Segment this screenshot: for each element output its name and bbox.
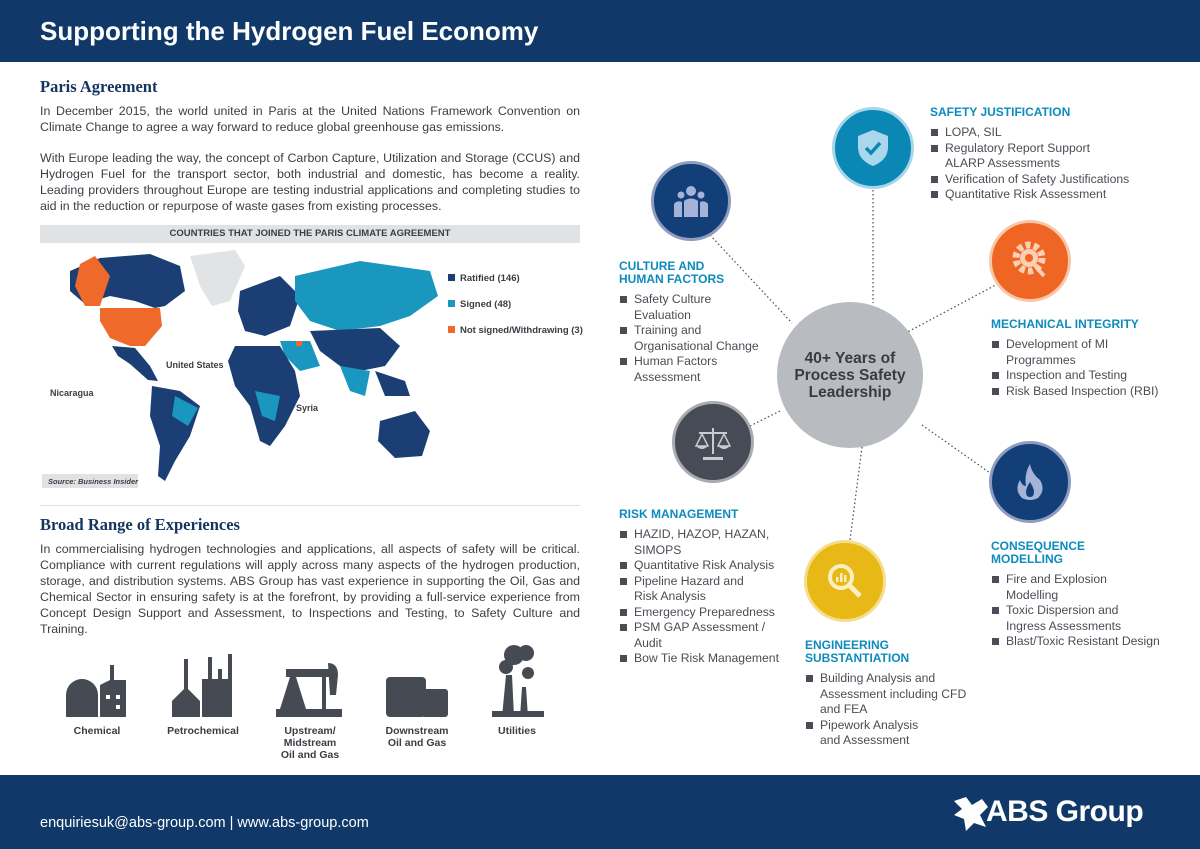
block: consequence modelling: Modelling	[1006, 588, 1058, 602]
heading: Broad Range of Experiences: Broad Range of Experiences	[40, 515, 240, 534]
industry icons: Chemical	[74, 725, 120, 737]
icon: chemical	[66, 665, 126, 717]
industry icons: Midstream	[284, 737, 336, 749]
footer bar	[0, 775, 1200, 849]
title: Supporting the Hydrogen Fuel Economy	[40, 16, 538, 46]
block: risk management: SIMOPS	[634, 542, 681, 556]
block: culture and human factors: Assessment	[634, 370, 700, 384]
icon: engineering magnifier	[804, 540, 886, 622]
center circle: Leadership	[809, 384, 891, 400]
block: consequence modelling	[991, 539, 1160, 648]
text: experiences paragraph: In commercialising hydrogen technologies and applications, all aspects of safety will be critical. Compliance with current regulations will apply across many aspects of the hydrogen production, storage, and distribution systems. ABS Group has vast experience in supporting the Oil, Gas and Chemical Sector in ensuring safety is at the forefront, by providing a full-service experience from Concept Design Support and Assessment, to Inspections and Testing, to Safety Culture and Training.	[40, 542, 580, 636]
world map: Nicaragua	[50, 388, 95, 398]
text: paris paragraph: In December 2015, the world united in Paris at the United Nations Framework Convention on Climate Change to agree a way forward to reduce global greenhouse gas emissions.	[40, 104, 580, 134]
map title bar	[40, 225, 580, 243]
world map	[42, 250, 438, 488]
icon: petrochemical	[172, 654, 232, 717]
block: mechanical integrity: MECHANICAL INTEGRITY	[991, 317, 1139, 331]
icon: mechanical gear	[989, 220, 1071, 302]
block: mechanical integrity	[991, 317, 1158, 398]
world map: United States	[166, 360, 224, 370]
block: culture and human factors: CULTURE AND	[619, 259, 704, 273]
center circle: 40+ Years of	[805, 350, 895, 366]
block: culture and human factors: Evaluation	[634, 308, 691, 322]
block: risk management: Quantitative Risk Analysis	[634, 558, 774, 572]
text: paris paragraph	[40, 104, 580, 213]
world map: Syria	[296, 403, 319, 413]
industry icons: Utilities	[498, 725, 536, 737]
block: consequence modelling: CONSEQUENCE	[991, 539, 1085, 553]
block: engineering substantiation	[805, 638, 966, 747]
industry icons: Upstream/	[284, 725, 336, 737]
heading: Paris Agreement: Paris Agreement	[40, 77, 157, 96]
block: safety justification: Regulatory Report Support	[945, 140, 1090, 154]
header bar	[0, 0, 1200, 62]
block: risk management: Emergency Preparedness	[634, 604, 775, 618]
map legend: Signed (48)	[460, 299, 511, 310]
block: consequence modelling: Toxic Dispersion and	[1006, 603, 1118, 617]
map legend: Not signed/Withdrawing (3)	[460, 325, 583, 336]
center circle	[777, 302, 923, 448]
icon: upstream	[276, 663, 342, 717]
block: engineering substantiation: and FEA	[820, 702, 867, 716]
block: culture and human factors: Human Factors	[634, 354, 717, 368]
block: culture and human factors: Safety Culture	[634, 292, 711, 306]
block: consequence modelling: Fire and Explosion	[1006, 572, 1107, 586]
map legend: Ratified (146)	[460, 273, 520, 284]
block: risk management: Pipeline Hazard and	[634, 574, 744, 588]
block: risk management: Bow Tie Risk Management	[634, 651, 779, 665]
block: safety justification: ALARP Assessments	[945, 156, 1060, 170]
industry icons: Petrochemical	[167, 725, 239, 737]
block: safety justification	[930, 105, 1129, 201]
block: safety justification: SAFETY JUSTIFICATION	[930, 105, 1070, 119]
block: engineering substantiation: Pipework Analysis	[820, 718, 918, 732]
industry icons: Oil and Gas	[281, 749, 339, 761]
block: culture and human factors	[619, 259, 759, 384]
block: safety justification: Verification of Safety Justifications	[945, 172, 1129, 186]
block: risk management: Audit	[634, 636, 662, 650]
block: culture and human factors: Organisational Change	[634, 338, 759, 352]
block: risk management	[619, 507, 779, 665]
logo: ABS Group: ABS Group	[986, 795, 1143, 828]
block: engineering substantiation: SUBSTANTIATION	[805, 651, 909, 665]
block: consequence modelling: MODELLING	[991, 552, 1063, 566]
world map: Source: Business Insider	[48, 477, 139, 486]
block: mechanical integrity: Inspection and Testing	[1006, 368, 1127, 382]
block: engineering substantiation: and Assessment	[820, 733, 909, 747]
block: risk management: HAZID, HAZOP, HAZAN,	[634, 527, 769, 541]
footer contact text: enquiriesuk@abs-group.com | www.abs-group.com	[40, 815, 369, 831]
industry icons: Downstream	[385, 725, 448, 737]
block: mechanical integrity: Risk Based Inspection (RBI)	[1006, 384, 1158, 398]
icon: culture people	[651, 161, 731, 241]
block: engineering substantiation: Building Analysis and	[820, 671, 935, 685]
block: mechanical integrity: Development of MI	[1006, 337, 1108, 351]
icon: consequence flame	[989, 441, 1071, 523]
block: engineering substantiation: Assessment including CFD	[820, 686, 966, 700]
block: culture and human factors: Training and	[634, 323, 701, 337]
industry icons	[66, 645, 544, 761]
block: consequence modelling: Blast/Toxic Resistant Design	[1006, 634, 1160, 648]
block: risk management: PSM GAP Assessment /	[634, 620, 765, 634]
block: risk management: RISK MANAGEMENT	[619, 507, 738, 521]
icon: downstream	[386, 677, 448, 717]
map legend	[448, 273, 583, 336]
block: culture and human factors: HUMAN FACTORS	[619, 272, 724, 286]
map title bar: COUNTRIES THAT JOINED THE PARIS CLIMATE AGREEMENT	[170, 228, 450, 239]
block: safety justification: Quantitative Risk Assessment	[945, 187, 1106, 201]
block: consequence modelling: Ingress Assessments	[1006, 618, 1121, 632]
hub diagram connectors	[710, 190, 997, 540]
icon: utilities	[492, 645, 544, 717]
block: safety justification: LOPA, SIL	[945, 125, 1002, 139]
icon: risk scales	[672, 401, 754, 483]
block: mechanical integrity: Programmes	[1006, 352, 1076, 366]
block: risk management: Risk Analysis	[634, 589, 706, 603]
block: engineering substantiation: ENGINEERING	[805, 638, 889, 652]
industry icons: Oil and Gas	[388, 737, 446, 749]
text: paris paragraph: With Europe leading the way, the concept of Carbon Capture, Utilization and Storage (CCUS) and Hydrogen Fuel for the transport sector, both industrial and domestic, has become a reality. Leading providers throughout Europe are testing industrial applications and completing studies to aid in the reduction or repurpose of waste gases from existing processes.	[40, 151, 580, 213]
icon: safety shield	[832, 107, 914, 189]
center circle: Process Safety	[794, 366, 906, 384]
